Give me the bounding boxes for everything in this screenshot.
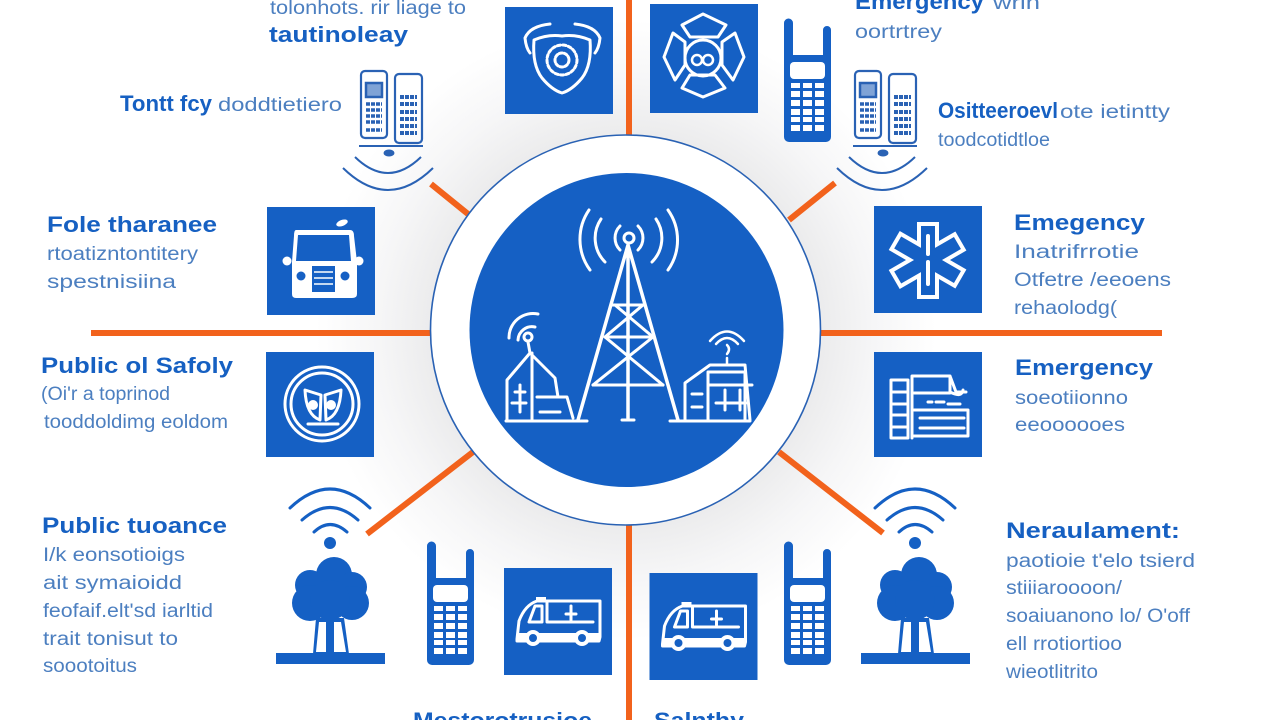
icon: right building (670, 332, 752, 421)
text block: emergency medical: rehaolodg( (1014, 298, 1118, 319)
text block: top right (855, 0, 1040, 43)
panel: ambulance icon left (504, 568, 612, 675)
text block: lower right (1005, 518, 1195, 683)
text block: emergency medical: Emegency (1014, 210, 1146, 235)
text block: public guidance (42, 513, 227, 677)
text block: emergency medical: Inatrifrrotie (1014, 242, 1139, 263)
text block: lower right: wieotlitrito (1005, 662, 1098, 683)
icon: handset pair right (837, 71, 927, 190)
text block: public guidance: soootoitus (43, 656, 137, 677)
text block: upper left label: doddtietiero (218, 95, 342, 116)
icon: walkie phone top right (784, 18, 831, 142)
soft glow behind hub (316, 20, 936, 640)
text block: public guidance: Public tuoance (42, 513, 227, 538)
panel: emblem icon (266, 352, 374, 457)
text block: fire: Fole tharanee (47, 212, 217, 237)
text block: public safety: tooddoldimg eoldom (44, 412, 228, 433)
text block: emergency records: eeoooooes (1015, 415, 1125, 436)
text block: upper right label: toodcotidtloe (938, 130, 1050, 151)
text block: public safety: Public ol Safoly (41, 353, 234, 378)
text block: lower right: soaiuanono lo/ O'off (1006, 606, 1191, 627)
icon: tree with wifi left (276, 489, 385, 664)
central hub (430, 135, 820, 525)
text block: fire: rtoatizntontitery (47, 244, 199, 265)
icon: radio tower (578, 210, 678, 420)
text block: public guidance: trait tonisut to (43, 629, 178, 650)
text block: fire (47, 212, 217, 293)
icon: tree with wifi right (861, 489, 970, 664)
text block: top left: tautinoleay (269, 22, 409, 47)
panel: shield icon (505, 7, 613, 114)
text block: lower right: stiiiaroooon/ (1006, 578, 1123, 599)
panel: documents icon (874, 352, 982, 457)
text block: public guidance: ait symaioidd (43, 573, 182, 594)
text block: upper right label: Ositteeroevl (938, 98, 1058, 123)
text block: lower right: ell rrotiortioo (1006, 634, 1122, 655)
icon: walkie phone bottom left (427, 542, 474, 665)
panel: ambulance icon right (650, 573, 758, 680)
panel: fire cross icon (650, 4, 758, 113)
text block: lower right: Neraulament: (1006, 518, 1180, 543)
icon: walkie phone bottom right (784, 542, 831, 665)
text block: upper left label: Tontt fcy (120, 91, 213, 116)
text block: public guidance: feofaif.elt'sd iarltid (43, 601, 213, 622)
text block: top right: oortrtrey (855, 22, 943, 43)
text block: emergency records (1015, 355, 1154, 436)
text block: upper left label (120, 91, 342, 116)
icon: handset pair left (343, 71, 433, 190)
text block: fire: spestnisiina (47, 272, 177, 293)
text block: public guidance: I/k eonsotioigs (43, 545, 185, 566)
panel: fire truck icon (267, 207, 375, 315)
text block: upper right label: ote ietintty (1060, 102, 1171, 123)
text block: emergency records: Emergency (1015, 355, 1154, 380)
text block: public safety: (Oi'r a toprinod (41, 384, 170, 405)
text block: emergency records: soeotiionno (1015, 388, 1128, 409)
text block: lower right: paotioie t'elo tsierd (1006, 551, 1195, 572)
panel: star of life icon (874, 206, 982, 313)
text block: top left (269, 0, 466, 47)
icon: left building (506, 313, 587, 421)
text block: public safety (41, 353, 234, 433)
text block: emergency medical (1014, 210, 1171, 319)
text block: emergency medical: Otfetre /eeoens (1014, 270, 1171, 291)
text block: upper right label (938, 98, 1171, 151)
